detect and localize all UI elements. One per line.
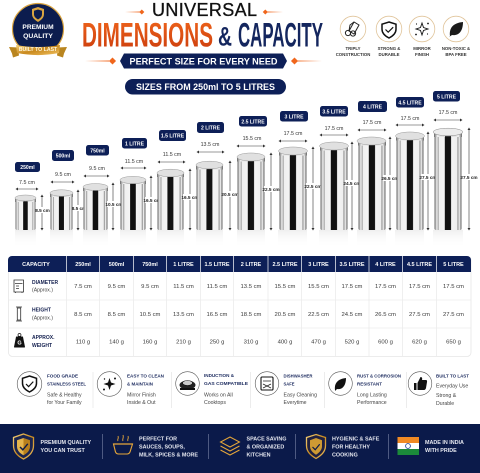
row: diameter: 7.5 cm [74,284,92,290]
icon: triply construction: TRIPLY [346,46,361,51]
badge: premium quality [9,4,67,58]
row: weight [14,334,461,349]
table header row [22,262,464,268]
feature: food grade: STAINLESS STEEL [47,382,86,386]
feature: easy to clean: Mirror Finish [127,392,156,398]
badge: premium quality: QUALITY [23,33,53,40]
badge: premium quality: BUILT TO LAST [19,47,58,53]
badge: made in india: WITH PRIDE [425,448,457,454]
feature: easy to clean: EASY TO CLEAN [127,374,165,378]
size item: 2 litre: 20.5 cm [221,192,239,197]
table header row: 4 LITRE [375,262,396,268]
badge: made in india [398,437,464,455]
row: height: 13.5 cm [173,312,194,318]
pill: sizes range [125,79,286,94]
row: diameter: 11.5 cm [207,284,227,290]
table header row: CAPACITY [22,262,50,268]
feature: dishwasher: Easy Cleaning [284,392,317,398]
row: height: 27.5 cm [443,312,464,318]
row: weight: G [17,340,22,346]
size item: 500ml: 9.5 cm [55,172,72,178]
row: diameter: 17.5 cm [443,284,464,290]
feature: induction: Works on All [204,392,233,398]
row: weight: 210 g [176,340,191,346]
size item: 4 litre: 17.5 cm [363,120,382,126]
row: weight: 470 g [311,340,326,346]
badge: space saving: SPACE SAVING [246,436,286,442]
row: height: HEIGHT [32,308,51,314]
badge: made in india: MADE IN INDIA [425,440,464,446]
row: weight: 160 g [143,340,157,346]
row: height: 22.5 cm [308,312,329,318]
row: height: 18.5 cm [241,312,262,318]
size item: 2 litre [196,122,239,248]
table header row: 4.5 LITRE [407,262,432,268]
size item: 4 litre: 4 LITRE [363,104,383,110]
size item: 3.5 litre [319,106,361,248]
size item: 3 litre: 22.5 cm [304,184,322,189]
feature: dishwasher: Everytime [284,400,307,406]
row: height: 27.5 cm [409,312,430,318]
size item: 750ml: 750ml [90,148,105,154]
row: weight: 650 g [446,340,461,346]
size item: 2.5 litre [237,116,280,248]
size item: 4.5 litre: 27.5 cm [419,175,437,180]
row: diameter [14,280,464,294]
size item: 1 litre: 16.5 cm [143,198,161,203]
row: weight: 140 g [109,340,124,346]
feature: rust resistant [329,372,402,406]
size item: 3.5 litre: 3.5 LITRE [322,109,346,115]
icon: mirror finish: FINISH [415,52,429,57]
row: weight: 620 g [412,340,427,346]
row: diameter: 15.5 cm [308,284,329,290]
feature: induction: GAS COMPATIBLE [204,381,248,386]
feature: built to last: Everyday Use [436,384,468,390]
badge: hygienic: HYGIENIC & SAFE [332,436,380,442]
badge: perfect for sauces [113,435,198,458]
row: diameter: 9.5 cm [108,284,125,290]
feature: food grade: Safe & Healthy [47,392,82,398]
table header row: 1 LITRE [173,262,194,268]
row: weight: 400 g [278,340,292,346]
row: weight: 600 g [378,340,393,346]
table header row: 750ml [142,262,158,268]
row: height: (Approx.) [32,316,53,322]
size item: 4.5 litre: 17.5 cm [401,116,420,122]
row: height: 8.5 cm [108,312,125,318]
table header row: 2.5 LITRE [272,262,298,268]
size item: 5 litre: 17.5 cm [439,110,458,116]
feature: dishwasher: DISHWASHER [284,374,313,378]
badge: hygienic [306,434,380,458]
size item: 2 litre: 13.5 cm [201,142,220,148]
row: weight: 520 g [345,340,359,346]
badge: perfect for sauces: MILK, SPICES & MORE [139,452,198,458]
table header row: 250ml [75,262,91,268]
icon: triply construction: CONSTRUCTION [336,52,370,57]
row: weight: 110 g [76,340,90,346]
feature: easy to clean: Inside & Out [127,400,156,406]
spec table [8,256,471,356]
decorative arrow: title left [125,9,144,15]
row: diameter: 17.5 cm [409,284,430,290]
feature: easy to clean [97,372,165,406]
size item: 250ml [15,162,50,248]
row: height: 10.5 cm [140,312,161,318]
feature: built to last: Strong & [436,393,457,399]
size item: 4 litre [357,101,399,248]
row: height: 24.5 cm [342,312,363,318]
row: diameter: (Approx.) [32,288,53,294]
badge: hygienic: COOKING [332,452,358,458]
icon: mirror finish: MIRROR [413,46,432,51]
icon: triply construction [336,16,370,57]
size item: 250ml: 8.5 cm [35,208,50,213]
title: ampersand: & [218,22,232,52]
size item: 4.5 litre: 4.5 LITRE [398,100,422,106]
badge: space saving: KITCHEN [246,452,271,458]
size item: 500ml: 500ml [56,154,71,160]
size item: 250ml: 250ml [20,165,35,171]
table header row: 1.5 LITRE [204,262,230,268]
feature: easy to clean: & MAINTAIN [127,382,154,386]
title: universal: UNIVERSAL [152,0,257,20]
feature: rust resistant: Performance [357,400,387,406]
pill: sizes range: SIZES FROM 250ml TO 5 LITRES [136,82,275,92]
feature: built to last: Durable [436,401,454,407]
row: diameter: 13.5 cm [241,284,262,290]
row: diameter: 11.5 cm [173,284,194,290]
size item: 250ml: 7.5 cm [19,180,36,186]
row: height [16,307,464,322]
row: diameter: 17.5 cm [375,284,396,290]
ribbon: perfect size: PERFECT SIZE FOR EVERY NEED [130,56,278,66]
size item: 1.5 litre: 16.5 cm [181,195,199,200]
icon: non-toxic: BPA FREE [445,52,467,57]
row: diameter: DIAMETER [32,280,58,286]
bottom band [0,424,480,473]
size item: 5 litre [433,91,478,248]
size item: 3 litre: 3 LITRE [285,114,304,120]
feature: rust resistant: Long Lasting [357,392,387,398]
row: diameter: 15.5 cm [275,284,296,290]
icon: non-toxic [442,16,470,57]
size item: 4 litre: 26.5 cm [381,176,399,181]
row: height: 26.5 cm [375,312,396,318]
size item: 3 litre [278,111,322,248]
row: height: 8.5 cm [74,312,92,318]
feature: induction: Cooktops [204,400,226,406]
size item: 500ml [50,150,86,248]
decorative arrow: ribbon right [291,57,322,65]
size item: 1 litre: 11.5 cm [125,159,144,165]
size item: 3 litre: 17.5 cm [284,131,303,137]
icon: mirror finish [409,16,435,57]
feature: induction: INDUCTION & [204,373,235,378]
badge: premium quality: PREMIUM [22,24,54,31]
feature: rust resistant: RESISTANT [357,382,382,386]
ribbon: perfect size [120,54,287,68]
icon: strong and durable [376,16,402,57]
row: diameter: 17.5 cm [342,284,363,290]
size item: 2.5 litre: 2.5 LITRE [241,119,265,125]
badge: space saving [220,436,286,458]
badge: premium quality trust: PREMIUM QUALITY [40,440,92,446]
table header row: 5 LITRE [443,262,464,268]
size item: 3.5 litre: 24.5 cm [343,181,361,186]
badge: space saving: & ORGANIZED [246,444,284,450]
badge: premium quality trust: YOU CAN TRUST [40,448,86,454]
decorative arrow: title right [263,9,283,15]
size item: 3.5 litre: 17.5 cm [325,126,344,132]
feature: dishwasher: SAFE [284,382,294,386]
badge: premium quality trust [14,434,92,459]
size item: 750ml: 10.5 cm [105,202,123,207]
text: CAPACITY [238,16,323,54]
feature: dishwasher [255,372,317,406]
table header row: 500ml [109,262,125,268]
feature: built to last: BUILT TO LAST [436,374,469,378]
size item: 750ml: 9.5 cm [89,166,106,172]
row: height: 16.5 cm [207,312,228,318]
title: dimensions: DIMENSIONS [82,16,213,54]
size item: 500ml: 8.5 cm [72,206,86,211]
size item: 750ml [83,145,123,248]
size item: 2.5 litre: 15.5 cm [243,136,262,142]
row: diameter: 9.5 cm [141,284,159,290]
decorative arrow: ribbon left [85,57,116,65]
row: height: 20.5 cm [275,312,296,318]
size item: 4.5 litre [395,97,437,248]
icon: non-toxic: NON-TOXIC & [442,46,470,51]
table header row: 3.5 LITRE [339,262,365,268]
icon: strong and durable: STRONG & [378,46,400,51]
row: weight: APPROX. [32,335,55,341]
feature: food grade: FOOD GRADE [47,374,78,378]
size item: 5 litre: 5 LITRE [437,94,457,100]
size item: 1.5 litre: 11.5 cm [163,152,182,158]
table header row: 2 LITRE [241,262,262,268]
size item: 2.5 litre: 22.5 cm [262,187,280,192]
row: weight: 310 g [244,340,258,346]
size item: 1 litre [120,138,161,248]
feature: food grade: for Your Family [47,400,82,406]
row: weight: WEIGHT [32,343,52,349]
badge: perfect for sauces: SAUCES, SOUPS, [139,444,185,450]
feature dividers [93,372,406,408]
table header row: 3 LITRE [308,262,329,268]
feature: food grade [17,372,86,406]
row: weight: 250 g [210,340,224,346]
feature: rust resistant: RUST & CORROSION [357,374,402,378]
size item: 5 litre: 27.5 cm [460,175,478,180]
size item: 1.5 litre: 1.5 LITRE [161,134,185,140]
feature: induction [176,372,248,406]
icon: strong and durable: DURABLE [378,52,400,57]
size item: 2 litre: 2 LITRE [201,126,221,132]
badge: perfect for sauces: PERFECT FOR [139,436,177,442]
size item: 1 litre: 1 LITRE [125,141,145,147]
badge: hygienic: FOR HEALTHY [332,444,370,450]
feature: built to last [408,372,469,407]
size item: 1.5 litre [157,130,199,248]
